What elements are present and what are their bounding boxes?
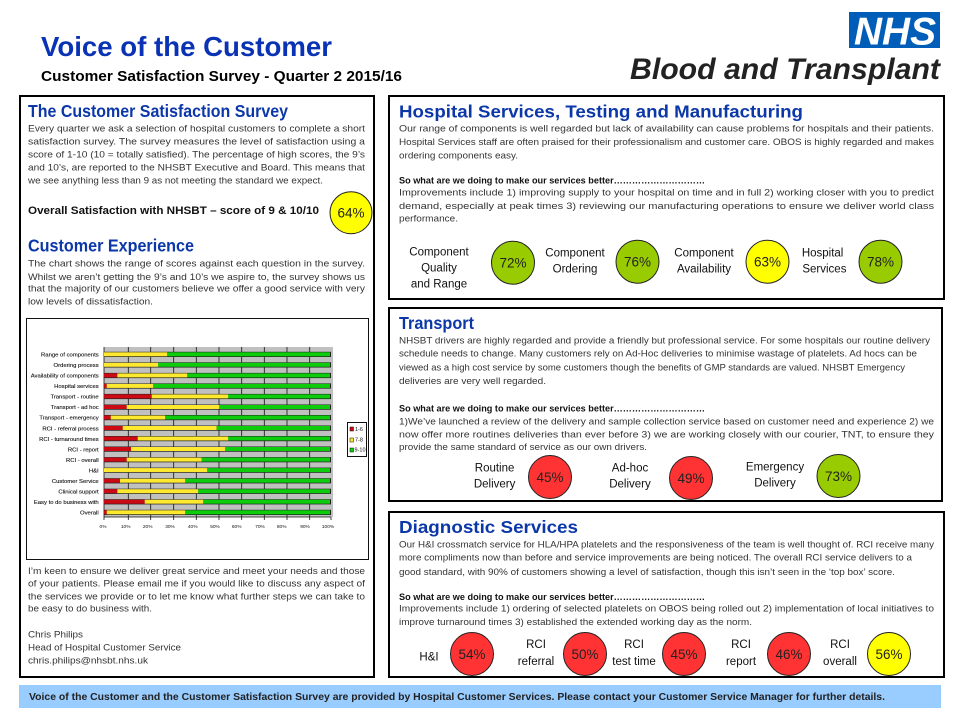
x axis labels: 50%	[210, 524, 221, 530]
text block: closing message: of your patients. Please email me if you would like to discuss any aspect of	[28, 578, 365, 589]
x axis labels: 100%	[322, 524, 335, 530]
text block: customer experience	[28, 258, 365, 306]
metric: component ordering 76%: 76%	[624, 254, 651, 270]
metric: H&I 54%: H&I	[419, 652, 439, 664]
text block: diagnostic services improvements: Improvements include 1) ordering of selected platelets on OBOS being rolled out 2) implementation of local initiatives to	[399, 603, 934, 614]
metric: emergency delivery 73%: Delivery	[754, 478, 796, 490]
metric: RCI test time 45%: RCI	[624, 639, 644, 651]
metric: component quality and range 72%: 72%	[499, 256, 527, 270]
category labels: Transport - emergency	[39, 416, 99, 422]
panel: customer satisfaction survey	[20, 96, 374, 677]
score circle: overall 64%	[330, 192, 372, 234]
text block: hospital services summary	[399, 123, 934, 160]
text block: closing message	[28, 565, 365, 614]
metric: component ordering 76%: Component	[545, 248, 606, 260]
metric: component quality and range 72%: Quality	[421, 263, 457, 275]
metric: component availability 63%: 63%	[754, 254, 781, 270]
subtitle: Customer Satisfaction Survey - Quarter 2 2015/16	[41, 69, 402, 85]
text block: transport summary: NHSBT drivers are highly regarded and provide a friendly but professional service. For some hospitals our routine delivery	[399, 334, 930, 345]
text block: hospital services improvements: demand, especially at peak times 3) reviewing our manufacturing operations to ensure we deliver world class	[399, 200, 934, 211]
text block: closing message: I’m keen to ensure we deliver great service and meet your needs and those	[28, 565, 365, 576]
metric: RCI referral 50%: referral	[518, 656, 554, 668]
metric: component quality and range 72%: and Range	[411, 279, 467, 291]
x axis labels: 20%	[143, 524, 153, 530]
category labels: Overall	[80, 510, 99, 516]
category labels: Range of components	[41, 352, 99, 358]
category labels: RCI - report	[68, 448, 99, 454]
text block: customer experience: low levels of dissatisfaction.	[28, 295, 153, 306]
category labels: Transport - routine	[50, 394, 99, 400]
metric: RCI overall 56%: overall	[823, 656, 857, 668]
metric: ad-hoc delivery 49%: Ad-hoc	[612, 463, 648, 475]
category labels: Customer Service	[52, 479, 99, 485]
x axis labels: 70%	[255, 524, 266, 530]
metric: RCI test time 45%: 45%	[670, 647, 698, 662]
footer banner	[19, 685, 941, 708]
heading: transport: Transport	[399, 313, 474, 333]
text block: survey introduction: we see anything less than 9 as not meeting the standard we expect.	[27, 174, 323, 185]
category labels: Ordering process	[54, 363, 99, 369]
panel: diagnostic services	[389, 512, 944, 677]
text block: customer experience: that the majority of our customers believe we offer a good service with very	[28, 283, 365, 294]
metric: component availability 63%	[674, 240, 789, 283]
text block: transport summary: deliveries are very well regarded.	[399, 375, 546, 386]
text block: survey introduction: satisfaction survey. The survey measures the level of satisfaction using a	[28, 135, 366, 146]
text block: hospital services summary: Hospital Services staff are often praised for their professionalism and customer care. OBOS is highly regarded and makes	[399, 136, 934, 147]
metric: routine delivery 45%: 45%	[536, 470, 564, 485]
text block: hospital services improvements	[399, 174, 934, 224]
metric: routine delivery 45%: Routine	[475, 463, 514, 475]
metric: RCI test time 45%	[612, 632, 706, 676]
text block: transport improvements: now offer more routines deliveries than ever before 3) we are working closely with our courier, TNT, to ensure they	[399, 428, 934, 439]
overall satisfaction label: Overall Satisfaction with NHSBT – score of 9 & 10/10	[28, 205, 319, 217]
metric: emergency delivery 73%: 73%	[825, 469, 852, 484]
metric: component ordering 76%	[545, 240, 659, 283]
chart legend: 1-6	[355, 427, 363, 433]
panel: transport	[389, 308, 942, 501]
text block: contact details: Head of Hospital Customer Service	[28, 642, 181, 653]
title: Voice of the Customer	[41, 31, 332, 62]
metric: RCI referral 50%: RCI	[526, 639, 546, 651]
x axis labels: 40%	[188, 524, 198, 530]
text block: transport summary: viewed as a high cost service by some customers though the benefits of GMP standards are valued. NHSBT Emergency	[399, 362, 905, 373]
metric: emergency delivery 73%	[746, 454, 860, 498]
text block: diagnostic services summary: more compliments now than before and service improvements are being noticed. The overall RCI service delivers to a	[399, 552, 913, 563]
chart legend	[348, 422, 366, 456]
metric: component quality and range 72%	[409, 241, 534, 291]
text block: closing message: be easy to do business with.	[28, 603, 152, 614]
logo: NHS Blood and Transplant	[630, 10, 941, 86]
text block: hospital services improvements: So what are we doing to make our services better…………………………	[399, 174, 705, 185]
text block: hospital services improvements: performance.	[399, 213, 458, 224]
metric: routine delivery 45%: Delivery	[474, 479, 516, 491]
metric: RCI report 46%: 46%	[775, 647, 803, 662]
text block: diagnostic services improvements: improve turnaround times 3) established the extended working day as the norm.	[399, 616, 752, 627]
category labels: RCI - overall	[66, 458, 99, 464]
metric: ad-hoc delivery 49%: 49%	[677, 471, 705, 486]
metric: hospital services 78%	[802, 240, 902, 283]
metric: RCI overall 56%: RCI	[830, 639, 850, 651]
text block: transport improvements: provide the same standard of service as our own drivers.	[399, 441, 647, 452]
metric: hospital services 78%: 78%	[867, 254, 894, 270]
text block: customer experience: The chart shows the range of scores against each question in the survey.	[28, 258, 365, 269]
text block: hospital services improvements: Improvements include 1) improving supply to your hospital on time and in full 2) working closer with you to predict	[399, 187, 934, 198]
heading: diagnostic services: Diagnostic Services	[399, 517, 578, 537]
x axis labels: 60%	[232, 524, 242, 530]
text block: transport improvements	[399, 403, 934, 452]
text block: closing message: the services we provide or to let me know what further steps we can take to	[28, 590, 365, 601]
metric: hospital services 78%: Hospital	[802, 248, 843, 260]
text block: diagnostic services summary: Our H&I crossmatch service for HLA/HPA platelets and the responsiveness of the team is well thought of. RCI receive many	[399, 538, 934, 549]
x axis labels: 10%	[121, 524, 131, 530]
metric: RCI report 46%: RCI	[731, 639, 751, 651]
text block: hospital services summary: Our range of components is well regarded but lack of availability can cause problems for hospitals and their patients.	[399, 123, 934, 134]
stacked bar chart: range of scores per question	[26, 318, 368, 560]
x axis labels	[100, 524, 335, 530]
stacked bars	[104, 352, 331, 515]
category labels: Hospital services	[54, 384, 99, 390]
text block: contact details: chris.philips@nhsbt.nhs.uk	[28, 654, 148, 665]
metric: hospital services 78%: Services	[802, 264, 847, 276]
text block: transport improvements: So what are we doing to make our services better…………………………	[399, 403, 705, 414]
metric: RCI report 46%: report	[726, 656, 757, 668]
category labels: RCI - referral process	[42, 426, 99, 432]
text block: hospital services summary: ordering components easy.	[399, 149, 518, 160]
category labels: H&I	[89, 468, 99, 474]
metric: component ordering 76%: Ordering	[553, 264, 597, 276]
x axis labels: 80%	[277, 524, 287, 530]
category labels: Easy to do business with	[34, 500, 99, 506]
text block: transport summary: schedule needs to change. Many customers rely on Ad-Hoc deliveries to minimise wastage of platelets. Ad hocs can be	[399, 348, 917, 359]
text block: transport summary	[399, 334, 930, 386]
x axis labels: 30%	[165, 524, 176, 530]
text block: survey introduction	[27, 123, 366, 185]
text block: transport improvements: 1)We’ve launched a review of the delivery and sample collection service based on customer need and experience 2) we	[399, 415, 934, 426]
metric: ad-hoc delivery 49%	[609, 456, 712, 500]
metric: emergency delivery 73%: Emergency	[746, 462, 804, 474]
logo: NHS Blood and Transplant: NHS	[854, 10, 936, 54]
metric: RCI report 46%	[726, 632, 810, 676]
text block: survey introduction: score of 1-10 (10 = totally satisfied). The percentage of high scores, the 9’s	[28, 149, 365, 160]
logo: NHS Blood and Transplant: Blood and Transplant	[630, 53, 941, 86]
text block: diagnostic services improvements	[399, 591, 934, 627]
score circle: overall 64%: 64%	[337, 206, 365, 220]
text block: survey introduction: Every quarter we ask a selection of hospital customers to complete a short	[28, 123, 365, 134]
heading: the customer satisfaction survey: The Customer Satisfaction Survey	[28, 101, 288, 121]
metric: RCI test time 45%: test time	[612, 656, 656, 668]
text block: contact details: Chris Philips	[28, 629, 83, 640]
metric: H&I 54%	[419, 632, 494, 676]
heading: customer experience: Customer Experience	[28, 236, 194, 256]
metric: RCI overall 56%	[823, 632, 910, 676]
heading: hospital services: Hospital Services, Testing and Manufacturing	[399, 102, 803, 122]
metric: ad-hoc delivery 49%: Delivery	[609, 479, 651, 491]
text block: customer experience: Whilst we aren’t getting the 9’s and 10’s we aspire to, the survey shows us	[28, 271, 365, 282]
text block: diagnostic services improvements: So what are we doing to make our services better…………………………	[399, 591, 705, 602]
text block: survey introduction: and 10’s, are reported to the NHSBT Executive and Board. This means that	[28, 161, 365, 172]
category labels: Clinical support	[58, 490, 99, 496]
category labels	[31, 352, 99, 516]
metric: component availability 63%: Availability	[677, 264, 731, 276]
panel: hospital services, testing and manufacturing	[389, 96, 944, 299]
x axis labels: 90%	[300, 524, 311, 530]
category labels: RCI - turnaround times	[39, 437, 99, 443]
metric: RCI referral 50%	[518, 632, 606, 676]
text block: diagnostic services summary	[399, 538, 934, 577]
text block: diagnostic services summary: good standard, with 90% of customers showing a level of satisfaction, though this isn’t seen in the ‘top box’ score.	[399, 566, 895, 577]
metric: RCI referral 50%: 50%	[571, 647, 599, 662]
metric: H&I 54%: 54%	[458, 647, 486, 662]
category labels: Availability of components	[31, 374, 99, 380]
text block: contact details	[28, 629, 181, 665]
metric: RCI overall 56%: 56%	[875, 647, 903, 662]
metric: component quality and range 72%: Component	[409, 247, 470, 259]
metric: routine delivery 45%	[474, 456, 572, 498]
metric: component availability 63%: Component	[674, 248, 735, 260]
chart legend: 7-8	[355, 438, 363, 444]
category labels: Transport - ad hoc	[51, 405, 99, 411]
footer banner: Voice of the Customer and the Customer Satisfaction Survey are provided by Hospital Customer Services. Please contact your Customer Service Manager for further details.	[29, 692, 885, 703]
chart legend: 9-10	[354, 448, 366, 454]
x axis labels: 0%	[100, 524, 107, 530]
